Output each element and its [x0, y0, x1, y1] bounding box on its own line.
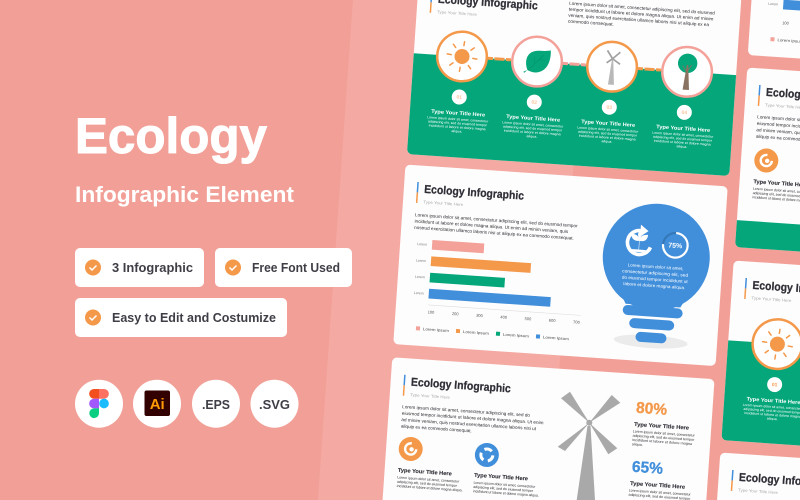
connectors	[488, 58, 661, 70]
step 1: sun: 01	[772, 382, 778, 388]
bar chart: 700	[573, 319, 581, 325]
feature pill: Easy to Edit and Costumize	[75, 298, 287, 337]
header accent	[758, 85, 761, 106]
card subtitle: Type Your Title Here	[410, 392, 451, 400]
chart legend: Lorem Ipsum	[463, 330, 489, 336]
bar chart: Lorem	[417, 242, 427, 247]
subheading: Infographic Element: Infographic Element	[75, 182, 295, 207]
step 1: sun: Lorem ipsum dolor sit amet, consectetur	[427, 115, 489, 123]
bar label: Lorem	[768, 2, 778, 6]
intro paragraph: veniam, quis nostrud exercitation ullamco laboris nisi ut aliquip ex ea	[568, 13, 710, 27]
text block: left item	[397, 468, 464, 492]
step 4: tree: adipiscing elit, sed do eiusmod tempor	[653, 135, 713, 143]
header accent	[430, 0, 433, 13]
bar chart: 100	[428, 309, 435, 315]
intro paragraph: Lorem ipsum dolor sit amet, consectetur adipiscing elit, sed do	[402, 404, 531, 418]
step 1: sun: aliqua.	[767, 417, 778, 421]
bar chart	[412, 239, 585, 325]
header accent	[731, 470, 734, 491]
light bulb	[597, 200, 713, 352]
step 1: sun: 01	[456, 95, 462, 101]
panel: windmill card	[379, 357, 715, 500]
progress ring 75%	[662, 232, 688, 258]
heading: Ecology: Ecology	[75, 108, 267, 164]
panel: timeline card	[407, 0, 741, 176]
icon: recycle sprout	[627, 224, 652, 255]
icon: orange recycle badge	[754, 148, 779, 173]
intro paragraph: aliquip ex ea commodo consequat.	[401, 424, 472, 433]
chart legend: Lorem Ipsum	[543, 335, 569, 341]
progress ring 75%: 75%	[668, 242, 683, 250]
step 3: windmill: adipiscing elit, sed do eiusmod tempor	[578, 130, 638, 138]
icon: Adobe Illustrator: Ai	[150, 396, 165, 413]
bar chart: 500	[524, 316, 532, 321]
card title: Ecology Infographic	[424, 184, 525, 203]
step 4: tree: incididunt ut labore et dolore magna	[654, 139, 711, 147]
step 2: leaf: Lorem ipsum dolor sit amet, consectetur	[502, 120, 564, 129]
stat: 80%: incididunt ut labore et dolore magna	[632, 438, 692, 446]
stat: 80%: aliqua.	[632, 442, 643, 447]
intro paragraph	[756, 114, 800, 148]
step 2: leaf: adipiscing elit, sed do eiusmod tempor	[503, 124, 563, 133]
intro paragraph: tempor incididunt ut labore et dolore magna aliqua. Ut enim ad minim	[569, 7, 714, 22]
stat: 65%: Type Your Title Here	[630, 481, 685, 491]
step 3: windmill: Lorem ipsum dolor sit amet, consectetur	[577, 126, 639, 134]
panel: right column chart card	[748, 0, 800, 77]
green footer band	[407, 53, 736, 176]
bar: blue	[783, 0, 800, 18]
intro paragraph	[401, 404, 544, 438]
icon: EPS	[192, 380, 240, 428]
step 2: leaf: 02	[531, 100, 537, 106]
stat: 80%: Lorem ipsum dolor sit amet, consectetur	[633, 429, 696, 438]
legend entry: Lorem Ipsum	[777, 38, 800, 44]
stat: 65%	[628, 459, 694, 500]
step 1: sun: adipiscing elit, sed do eiusmod tempor	[428, 119, 488, 127]
step 2: leaf: aliqua.	[526, 134, 538, 139]
step 3: windmill: incididunt ut labore et dolore magna	[579, 134, 636, 142]
bar chart: Lorem	[414, 291, 424, 296]
intro paragraph: Lorem ipsum dolor sit amet, consectetur adipiscing elit, sed do eiusmod	[569, 1, 716, 16]
intro paragraph: nostrud exercitation ullamco laboris nisi ut aliquip ex ea commodo consequat.	[414, 225, 574, 241]
bulb text: labore et dolore magna aliqua.	[623, 281, 685, 290]
bulb text: consectetur adipiscing elit, sed	[622, 268, 689, 278]
feature pill: 3 Infographic: 3 Infographic	[112, 261, 193, 275]
legend entry	[770, 37, 800, 44]
icon: blue recycle badge	[474, 442, 500, 468]
step 2: leaf: incididunt ut labore et dolore magna	[504, 129, 561, 136]
intro paragraph	[414, 212, 578, 241]
icon: Adobe Illustrator	[133, 380, 181, 428]
feature pill: Free Font Used: Free Font Used	[252, 261, 340, 275]
chart legend: Lorem Ipsum	[423, 327, 449, 333]
card subtitle: Type Your Title Here	[423, 199, 464, 207]
step 4: tree: Type Your Title Here	[656, 124, 710, 134]
illustration: large windmill	[558, 392, 620, 500]
step 4: tree	[651, 45, 720, 151]
stat: 80%: adipiscing elit, sed do eiusmod tempor	[632, 434, 695, 442]
intro paragraph: ad minim veniam, quis nostrud exercitation ullamco laboris nisi ut	[401, 417, 537, 431]
step 1: sun: Type Your Title Here	[746, 397, 800, 406]
intro paragraph	[568, 1, 716, 34]
header accent	[403, 375, 406, 396]
panel: right column sun card	[721, 260, 800, 462]
intro paragraph: incididunt ut labore et dolore magna aliqua. Ut enim ad minim veniam, quis	[414, 219, 569, 234]
text block: left item: adipiscing elit, sed do eiusmod tempor	[397, 480, 458, 488]
feature pill: Easy to Edit and Costumize: Easy to Edit and Costumize	[112, 311, 276, 325]
stat: 80%: Type Your Title Here	[634, 422, 689, 432]
text block: middle item: adipiscing elit, sed do eiusmod tempor	[473, 485, 534, 493]
step 3: windmill: 03	[606, 105, 612, 111]
green footer band	[735, 220, 800, 269]
card subtitle: Type Your Title Here	[437, 9, 478, 17]
feature pill: 3 Infographic	[75, 248, 204, 287]
header accent	[416, 182, 419, 203]
step 1: sun: incididunt ut labore et dolore magna	[429, 123, 486, 131]
bar chart: 300	[476, 313, 484, 318]
bulb text	[621, 262, 690, 290]
bar chart: 200	[452, 311, 460, 317]
intro paragraph: commodo consequat.	[568, 19, 614, 27]
stat: 80%	[632, 400, 698, 450]
step 4: tree: aliqua.	[676, 144, 688, 149]
step 1: sun: Lorem ipsum dolor sit amet, consectetur	[743, 403, 800, 411]
panel: right column bottom card	[708, 452, 800, 500]
panel: bar chart and bulb card	[393, 164, 728, 366]
bar chart: Lorem	[415, 275, 425, 279]
stat: 80%: 80%	[636, 400, 668, 419]
intro paragraph: eiusmod tempor incididunt ut labore et dolore magna aliqua. Ut enim	[402, 411, 544, 425]
icon: Figma	[75, 380, 123, 428]
text block: left item: incididunt ut labore et dolore magna aliqua.	[397, 484, 463, 492]
text block: middle item: Lorem ipsum dolor sit amet, consectetur	[473, 481, 536, 489]
bulb text: do eiusmod tempor incididunt ut	[622, 275, 689, 284]
text block: middle item	[473, 473, 540, 498]
icon: orange recycle badge	[398, 436, 423, 462]
icon: SVG	[250, 380, 298, 428]
card subtitle: Type Your Title Here	[738, 487, 779, 495]
bar chart: 600	[549, 318, 557, 323]
step 3: windmill: aliqua.	[601, 139, 613, 144]
step 3: windmill	[576, 40, 645, 146]
step 1: sun: adipiscing elit, sed do eiusmod tempor	[743, 407, 800, 415]
step 1: sun	[742, 317, 800, 423]
feature pill: Free Font Used	[215, 248, 352, 287]
card subtitle: Type Your Title Here	[751, 295, 792, 303]
text block: left item: Type Your Title Here	[398, 468, 452, 477]
step 2: leaf	[501, 35, 570, 141]
text block	[752, 179, 800, 204]
intro paragraph: Lorem ipsum dolor sit amet, consectetur adipiscing elit, sed do eiusmod tempor	[415, 212, 578, 228]
text block: middle item: Type Your Title Here	[474, 473, 528, 482]
axis label: 100	[782, 20, 790, 26]
step 3: windmill: Type Your Title Here	[581, 119, 635, 129]
step 4: tree: 04	[681, 110, 687, 116]
chart legend	[416, 326, 569, 341]
bar chart: 400	[500, 314, 508, 320]
card title: Ecology Infographic	[411, 377, 512, 395]
icon: EPS: .EPS	[202, 397, 230, 412]
green footer band	[721, 340, 800, 462]
text block: left item: Lorem ipsum dolor sit amet, consectetur	[397, 475, 460, 484]
text block: middle item: incididunt ut labore et dolore magna aliqua.	[473, 489, 539, 498]
step 2: leaf: Type Your Title Here	[506, 114, 560, 124]
step 1: sun: incididunt ut labore et dolore magna	[744, 411, 800, 419]
bar chart: Lorem	[416, 258, 426, 263]
stat: 65%: 65%	[631, 459, 664, 478]
step 4: tree: Lorem ipsum dolor sit amet, consectetur	[652, 131, 714, 139]
header accent	[744, 278, 747, 299]
bulb text: Lorem ipsum dolor sit amet,	[628, 262, 684, 271]
panel: right column badge card	[735, 68, 800, 269]
stat: 65%: Lorem ipsum dolor sit amet, consectetur	[629, 488, 692, 497]
step 1: sun: aliqua.	[451, 129, 463, 134]
step 1: sun	[426, 30, 495, 135]
chart legend: Lorem Ipsum	[503, 333, 529, 338]
icon: SVG: .SVG	[259, 397, 290, 412]
step 1: sun: Type Your Title Here	[431, 109, 485, 119]
